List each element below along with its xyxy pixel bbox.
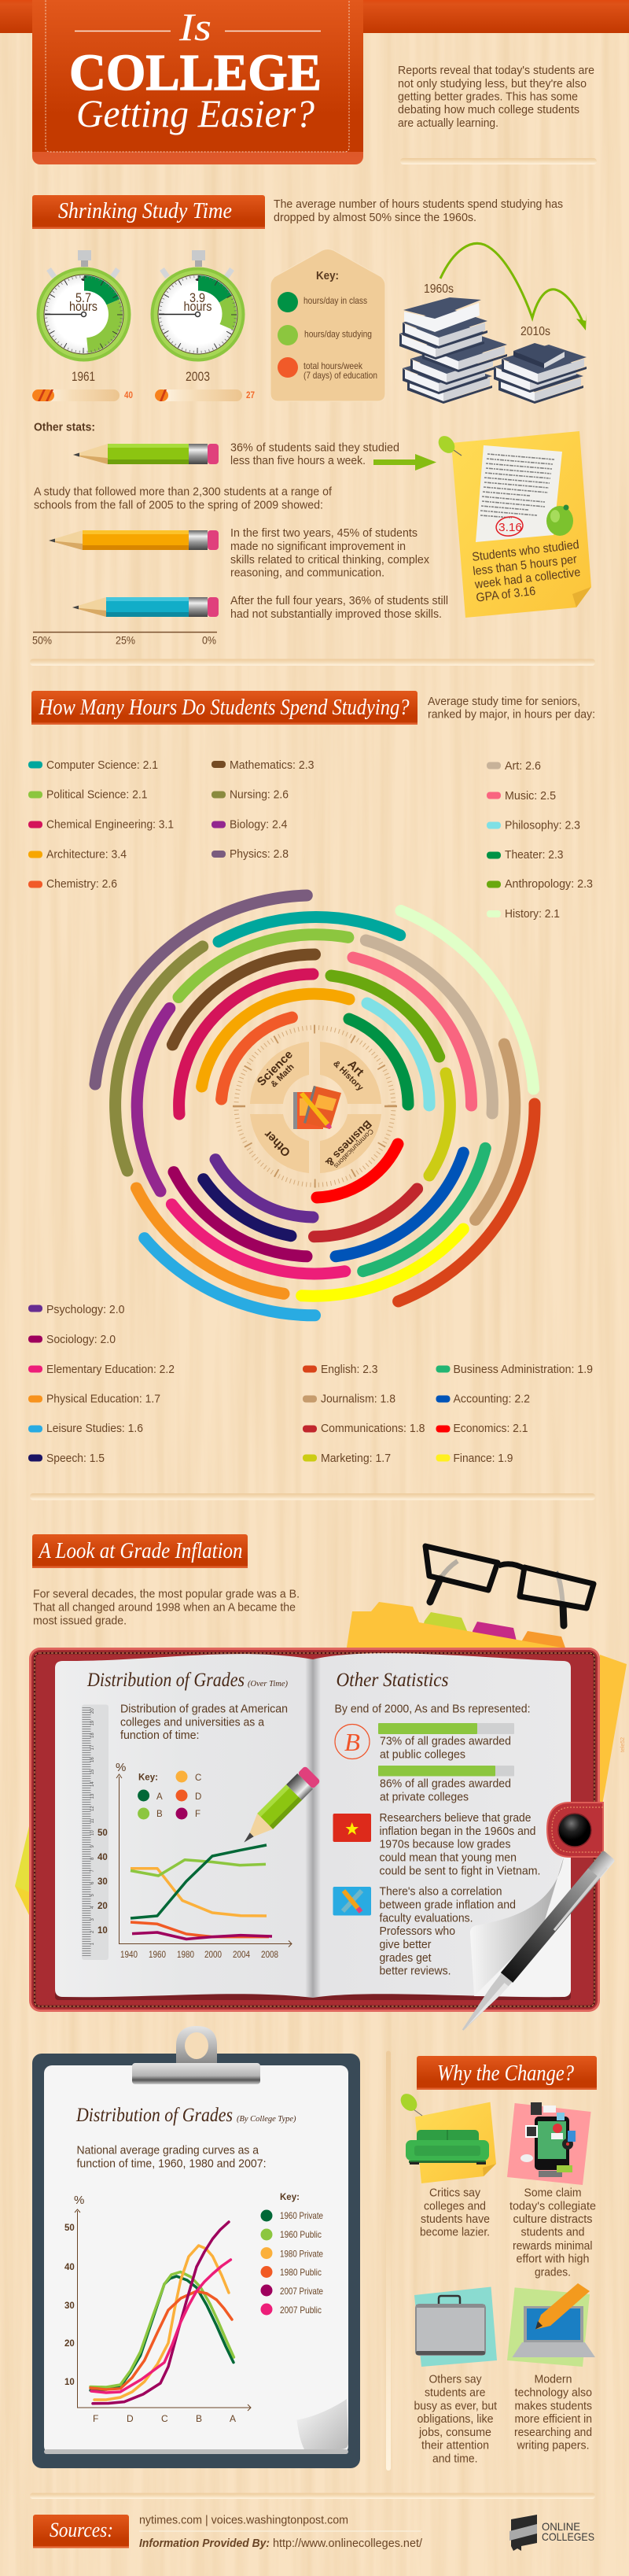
stat: first two years [230,526,429,579]
section heading: Grade Inflation: A Look at Grade Inflation [38,1539,243,1563]
line chart: grading curves: D [127,2413,134,2424]
stat: five hours: less than five hours a week. [230,454,366,467]
reason text: critics: become lazier. [420,2225,490,2239]
evaluation text: grades get [379,1951,432,1965]
legend: lower majors: Communications: 1.8 [321,1422,425,1435]
ruler: 14 [90,1781,95,1787]
right page heading: Other Statistics [337,1670,448,1691]
legend: lower majors: Finance: 1.9 [453,1452,513,1465]
legend: lower majors: Sociology: 2.0 [46,1333,116,1346]
legend: upper majors: Nursing: 2.6 [230,788,289,801]
line chart: distribution of grades over time [97,1761,292,1960]
stopwatch 2003: 2003 [186,369,210,384]
section intro: ranked by major, in hours per day: [428,708,595,721]
Vietnam text: inflation began in the 1960s and [379,1825,536,1838]
grade inflation intro: most issued grade. [33,1615,127,1627]
dial label: Art & History: Art [345,1057,366,1079]
green arrow [373,454,436,471]
curves key: 1960 Public [280,2229,322,2240]
curves key: 1980 Public [280,2267,322,2278]
reason text: distractions: today's collegiate [509,2200,596,2212]
chart description [120,1703,288,1742]
left page heading: (Over Time) [248,1680,289,1688]
ruler: 16 [90,1757,95,1762]
section heading: How Many Hours: How Many Hours Do Students Spend Studying? [39,695,410,720]
clipboard text [77,2143,266,2170]
ruler: 5 [90,1893,95,1896]
chart description: Distribution of grades at American [120,1703,288,1715]
bar 1961: 40 total hours: 40 [124,391,133,400]
section intro: Average study time for seniors, [428,695,580,708]
sources heading [33,2515,129,2548]
legend: upper majors: History: 2.1 [505,907,560,921]
clip [132,2026,260,2084]
legend: lower majors: Psychology: 2.0 [46,1303,124,1316]
section heading: Why the Change: Why the Change? [437,2061,574,2086]
arc ring 7 [95,895,535,1316]
reason text: distractions: culture distracts [513,2212,593,2226]
ruler: 15 [90,1769,95,1775]
bar 2003: 27 total hours [155,389,255,401]
clipboard heading: Distribution of Grades [75,2105,233,2126]
legend: upper majors: Anthropology: 2.3 [505,877,593,891]
curves key: 2007 Public [280,2305,322,2316]
Vietnam text: could be sent to fight in Vietnam. [379,1865,541,1877]
arc ring 2 [202,994,429,1217]
sources text: nytimes.com | voices.washingtonpost.com [139,2513,348,2527]
ruler: 4 [90,1906,95,1909]
dial label: Art & History [331,1050,374,1094]
bounce arrow [440,243,584,326]
grade inflation intro: For several decades, the most popular grade was a B. [33,1588,300,1600]
reason text: technology [514,2373,592,2452]
stats intro: By end of 2000, As and Bs represented: [335,1703,530,1715]
legend: upper majors: Chemical Engineering: 3.1 [46,818,174,831]
legend: upper majors: Chemistry: 2.6 [46,877,117,891]
orange pencil [49,530,219,550]
legend: lower majors: Physical Education: 1.7 [46,1393,160,1405]
arc ring 6 [116,917,515,1296]
key panel: Key: [316,269,339,282]
curves key: 1960 Private [280,2210,323,2221]
stat: first two years: In the first two years, 45% of students [230,526,417,540]
sources text: Information Provided By: [139,2537,270,2550]
reason text: busy: jobs, consume [418,2426,491,2439]
line chart: grading curves [64,2193,323,2424]
logo: Online Colleges: ONLINE [542,2520,580,2533]
section heading: How Many Hours [31,691,417,725]
dial label: Science & Math: Science [255,1048,296,1089]
curves key: Key: [280,2193,300,2202]
pencil scale axis: 25% [116,634,135,647]
reason: laptop note [507,2283,595,2367]
legend: upper majors: Political Science: 2.1 [46,788,148,801]
chart key: D [195,1792,201,1802]
reason: distractions phone note [507,2102,591,2185]
ruler: 2 [90,1930,95,1933]
icon: B grade [335,1725,370,1759]
dial quadrants [250,1042,381,1173]
curves key [261,2193,323,2316]
reason text: busy [414,2373,498,2466]
yellow sticky behind notebook [15,1766,54,1928]
section intro [428,695,595,721]
key panel [270,249,385,401]
page curl [470,1857,571,1997]
stat: five hours: 36% of students said they studied [230,441,399,455]
bar 1961: 40 total hours [32,389,133,401]
sources text: http://www.onlinecolleges.net/ [273,2537,423,2550]
left page heading: Distribution of Grades [86,1670,245,1691]
stat: first two years: reasoning, and communication. [230,566,384,579]
chart key [138,1770,201,1819]
stat: four years: had not substantially improved those skills. [230,607,442,621]
intro text [398,64,594,130]
section heading: Shrinking Study Time [32,195,265,229]
section intro: dropped by almost 50% since the 1960s. [274,211,476,224]
line chart: distribution of grades over time: 20 [97,1902,108,1911]
arc ring 3 [179,974,450,1237]
chart key: A [156,1792,163,1802]
ruler: 12 [90,1806,95,1811]
key panel: hours/day studying [304,329,372,340]
legend: lower majors: Economics: 2.1 [453,1422,528,1435]
section intro: The average number of hours students spend studying has [274,197,563,211]
intro text: debating how much college students [398,103,579,116]
line chart: distribution of grades over time: % [116,1761,126,1774]
stopwatch 1961: hours [69,299,97,314]
stopwatch 2003 [151,250,245,384]
legend: upper majors [28,758,593,921]
chart key: C [195,1773,201,1783]
grade inflation intro: That all changed around 1998 when an A became the [33,1600,296,1615]
stopwatch 1961 [36,250,131,384]
evaluation text: give better [379,1938,431,1951]
reason text: busy: their attention [421,2439,489,2452]
stat: four years [230,594,448,621]
top orange band [0,0,629,33]
stopwatch 2003: 3.9 [189,290,205,305]
pencil scale axis: 50% [32,634,52,647]
grade inflation intro [33,1588,300,1627]
ruler: 18 [90,1733,95,1738]
title: College: COLLEGE [69,44,322,101]
chart description: colleges and universities as a [120,1715,265,1729]
reason: lazier sofa note [397,2091,496,2183]
intro text: Reports reveal that today's students are [398,64,594,77]
reason text: critics: students have [421,2212,490,2226]
sources heading: Sources: [50,2519,113,2541]
ruler: 20 [90,1708,95,1714]
title ribbon [32,0,363,164]
dial label: Business & Communications: Communications [332,1127,375,1170]
arc ring 1 [222,1017,408,1198]
study intro text [34,485,333,511]
intro text: getting better grades. This has some [398,90,578,104]
book stacks: 1960s [424,282,454,296]
key panel: hours/day in class [303,295,367,306]
evaluation text: Professors who [379,1925,455,1938]
logo: Online Colleges [509,2515,594,2551]
evaluation text: faculty evaluations. [379,1912,473,1925]
book stacks: 2010s [520,325,550,338]
title: Getting Easier: Getting Easier? [76,91,314,135]
arc ring 4 [172,954,472,1257]
pen [457,1851,616,2035]
stopwatch 1961: 1961 [72,369,95,384]
title: Is: Is [178,5,212,49]
clipboard text: function of time, 1960, 1980 and 2007: [77,2157,266,2170]
line chart: distribution of grades over time: 2008 [261,1949,278,1960]
icon: books and pencil [293,1086,341,1129]
line chart: grading curves: 10 [64,2378,75,2387]
dial label: Other: Other [262,1127,293,1159]
ruler: 17 [90,1744,95,1750]
notebook [29,1648,616,2035]
green pencil [73,444,219,464]
center dial [233,1028,397,1185]
pencil scale axis: 0% [202,634,216,647]
reason text: busy: Others say [429,2373,482,2386]
ruler [82,1704,109,1960]
ruler: 9 [90,1844,95,1847]
radial chart: study hours by major [95,895,535,1316]
line chart: distribution of grades over time: 10 [97,1926,108,1936]
bar 2003: 27 total hours: 27 [246,391,255,400]
reason text: technology: more efficient in [514,2412,592,2426]
reason text: technology: technology also [514,2386,592,2400]
line chart: distribution of grades over time: 2004 [233,1949,250,1960]
book stacks [399,243,587,404]
eyeglasses [425,1546,594,1626]
evaluation text: better reviews. [379,1964,451,1978]
stat: five hours [230,441,399,467]
curves key: 1980 Private [280,2249,323,2260]
line chart: grading curves: 20 [64,2339,75,2349]
line chart: distribution of grades over time: 1960 [149,1949,166,1960]
reason text: technology: writing papers. [517,2439,590,2452]
sources text [139,2513,423,2550]
section heading: Why the Change [417,2056,597,2090]
reason text: distractions: Some claim [524,2186,582,2200]
legend: upper majors: Music: 2.5 [505,789,556,803]
intro text: are actually learning. [398,116,498,130]
chart key: Key: [138,1773,158,1783]
reason: briefcase note [414,2286,497,2367]
reason text: busy: students are [425,2386,486,2400]
icon: B grade: B [344,1728,360,1756]
reason text: distractions: rewards minimal [513,2239,593,2253]
line chart: grading curves: 40 [64,2263,75,2272]
line chart: distribution of grades over time: 50 [97,1829,108,1838]
legend: upper majors: Art: 2.6 [505,759,541,773]
line chart: distribution of grades over time: 2000 [204,1949,222,1960]
sticky note text: GPA of 3.16 [476,585,536,605]
clipboard text: National average grading curves as a [77,2143,259,2157]
clipboard [32,2026,360,2468]
legend: lower majors: Elementary Education: 2.2 [46,1363,175,1376]
small credit: tele52 [620,1737,626,1752]
reason text: critics: colleges and [424,2200,486,2212]
ruler: 6 [90,1881,95,1884]
legend: lower majors [28,1303,593,1465]
ruler: 13 [90,1793,95,1799]
line chart: distribution of grades over time: 30 [97,1877,108,1887]
line chart: grading curves: 50 [64,2224,75,2233]
key panel: (7 days) of education [303,370,377,381]
Vietnam text: 1970s because low grades [379,1838,511,1851]
reason text: busy: and time. [432,2452,478,2466]
section heading: Shrinking Study Time: Shrinking Study Time [58,199,232,223]
reason text: distractions: students and [520,2225,585,2239]
dial label: Business & Communications: Business & [323,1118,374,1169]
ruler: 10 [90,1830,95,1836]
bar: 73% public: at public colleges [380,1748,465,1761]
icon: Vietnam flag [333,1814,371,1842]
folders behind notebook [346,1602,627,1810]
study intro text: A study that followed more than 2,300 students at a range of [34,485,333,499]
line chart: grading curves: A [230,2413,236,2424]
bar: 73% public [378,1723,514,1761]
pushpin [435,433,462,456]
pencil scale axis [32,633,217,647]
sticky note: GPA [435,431,591,618]
line chart: grading curves: F [93,2413,98,2424]
stopwatch 1961: 5.7 [75,290,91,305]
section heading: Grade Inflation [32,1534,248,1568]
green pencil on page [236,1766,321,1851]
line chart: grading curves: 30 [64,2301,75,2311]
Vietnam text: Researchers believe that grade [379,1811,532,1825]
stat: four years: After the full four years, 36% of students still [230,594,448,607]
bar: 86% private: 86% of all grades awarded [380,1777,511,1791]
reason text: distractions: grades. [535,2266,571,2279]
bar: 73% public: 73% of all grades awarded [380,1734,511,1748]
ruler: 7 [90,1869,95,1873]
reason text: distractions [509,2186,596,2279]
evaluation text: There's also a correlation [379,1885,502,1898]
paper with grade: 3.16 [498,521,522,534]
paper curl [297,2399,348,2449]
legend: upper majors: Theater: 2.3 [505,848,563,862]
line chart: distribution of grades over time: 40 [97,1853,108,1862]
line chart: grading curves: C [161,2413,168,2424]
reason text: distractions: effort with high [516,2252,590,2266]
line chart: distribution of grades over time: 1980 [177,1949,194,1960]
bar: 86% private: at private colleges [380,1791,469,1803]
legend: upper majors: Architecture: 3.4 [46,848,127,861]
legend: lower majors: English: 2.3 [321,1363,377,1376]
intro text: not only studying less, but they're also [398,77,587,90]
line chart: distribution of grades over time: 1940 [120,1949,138,1960]
chart key: F [195,1810,200,1819]
evaluation text [379,1885,516,1978]
chart description: function of time: [120,1729,200,1742]
section intro [274,197,563,224]
paper with grade [476,445,562,542]
line chart: grading curves: % [74,2194,84,2207]
bar: 86% private [378,1766,514,1803]
stopwatch 2003: hours [184,299,212,314]
legend: upper majors: Physics: 2.8 [230,847,289,861]
legend: upper majors: Mathematics: 2.3 [230,758,314,772]
legend: upper majors: Philosophy: 2.3 [505,818,580,832]
dial label: Science & Math: & Math [269,1062,296,1090]
legend: upper majors: Biology: 2.4 [230,818,288,831]
blue pencil [72,597,219,617]
stat: first two years: made no significant improvement in [230,540,406,553]
sticky note text: week had a collective [473,566,581,592]
curves key: 2007 Private [280,2286,323,2297]
sticky note text: Students who studied [471,538,580,564]
legend: lower majors: Leisure Studies: 1.6 [46,1422,143,1435]
reason text: critics: Critics say [429,2186,480,2200]
sticky note text [470,538,585,605]
Vietnam text: could mean that young men [379,1851,517,1865]
left page [55,1654,313,1998]
ruler: 3 [90,1918,95,1921]
legend: lower majors: Accounting: 2.2 [453,1393,530,1405]
legend: lower majors: Business Administration: 1.9 [453,1363,593,1376]
clasp [547,1803,603,1857]
legend: lower majors: Speech: 1.5 [46,1452,105,1465]
line chart: grading curves: B [196,2413,202,2424]
legend: lower majors: Journalism: 1.8 [321,1393,395,1405]
logo: Online Colleges: COLLEGES [542,2530,594,2543]
dial label: Art & History: & History [331,1059,366,1094]
reason text: technology: makes students [514,2400,592,2412]
ruler: 11 [90,1818,95,1824]
reason text: technology: Modern [535,2373,572,2386]
reason text: busy: busy as ever, but [414,2400,498,2412]
evaluation text: between grade inflation and [379,1898,516,1912]
legend: lower majors: Marketing: 1.7 [321,1452,391,1465]
reason text: critics [420,2186,490,2239]
right page [313,1653,571,1998]
reason text: busy: obligations, like [417,2412,494,2426]
key panel: total hours/week [303,360,363,371]
ruler: 19 [90,1720,95,1726]
Vietnam text [379,1811,541,1877]
icon: pencil and ruler [333,1887,371,1915]
ruler: 8 [90,1857,95,1860]
sticky note text: less than 5 hours per [473,552,578,578]
clipboard heading: (By College Type) [237,2115,296,2124]
study intro text: schools from the fall of 2005 to the spring of 2009 showed: [34,499,323,511]
legend: upper majors: Computer Science: 2.1 [46,758,158,772]
arc ring 5 [137,935,492,1274]
apple [546,505,573,536]
ruler: 1 [90,1942,95,1945]
reason text: technology: researching and [514,2426,592,2439]
other stats heading: Other stats: [34,420,95,434]
stat: first two years: skills related to critical thinking, complex [230,553,429,566]
chart key: B [156,1810,163,1819]
